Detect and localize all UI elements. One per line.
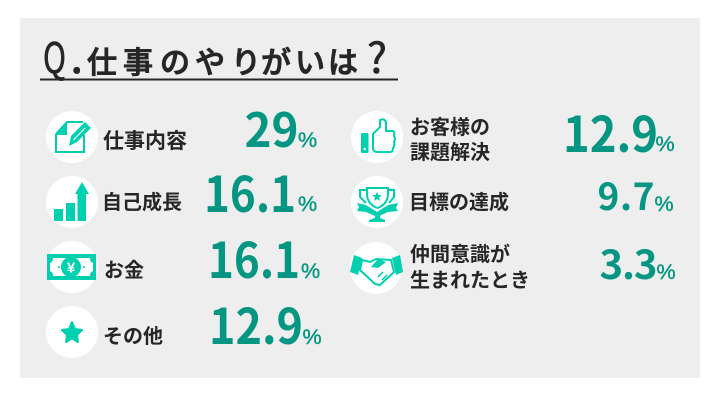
item: 仲間意識が生まれたとき 3.3% <box>350 233 676 294</box>
label: お客様の <box>410 116 490 139</box>
label <box>410 116 490 164</box>
percent: % <box>656 260 676 284</box>
item: 目標の達成 9.7% <box>351 167 674 228</box>
icon: trophy <box>351 176 403 228</box>
title: は <box>328 38 358 82</box>
value: 16.1 <box>204 156 296 227</box>
label: 目標の達成 <box>409 190 509 214</box>
value: 12.9 <box>563 96 658 167</box>
title: 仕 <box>87 38 117 82</box>
value: 12.9 <box>209 288 303 359</box>
item: 自己成長 16.1% <box>46 156 317 228</box>
icon: rising bars <box>46 176 98 228</box>
title: り <box>231 38 261 82</box>
label: 課題解決 <box>410 141 490 164</box>
item: 仕事内容 29% <box>46 92 317 163</box>
icon: paper and pencil <box>46 111 98 163</box>
label: 自己成長 <box>102 190 182 214</box>
percent: % <box>656 132 675 156</box>
icon: banknote: ¥ <box>67 260 76 276</box>
value: 3.3 <box>600 233 658 291</box>
icon: handshake <box>350 242 403 294</box>
title: Q <box>43 25 66 86</box>
label: その他 <box>103 325 163 348</box>
item: お金 16.1% <box>46 222 320 293</box>
icon: banknote <box>46 241 98 293</box>
label: 仕事内容 <box>103 129 187 153</box>
item: その他 12.9% <box>46 288 322 359</box>
title: . <box>71 29 82 84</box>
percent: % <box>302 325 322 349</box>
title: 事 <box>123 38 153 82</box>
percent: % <box>298 128 317 152</box>
value: 29 <box>244 92 298 161</box>
title: い <box>295 38 325 82</box>
value: 9.7 <box>598 167 654 221</box>
icon: thumbs up <box>351 111 403 163</box>
value: 16.1 <box>208 222 300 293</box>
percent: % <box>654 192 674 216</box>
title <box>40 25 398 86</box>
label: 仲間意識が <box>410 242 510 266</box>
label: 生まれたとき <box>410 269 530 292</box>
label <box>410 242 530 292</box>
percent: % <box>301 259 320 283</box>
label: お金 <box>104 259 144 282</box>
title: の <box>160 38 190 82</box>
title: が <box>261 38 291 82</box>
title: や <box>195 38 225 82</box>
title: ? <box>367 25 387 86</box>
percent: % <box>298 192 317 216</box>
item: お客様の課題解決 12.9% <box>351 96 675 167</box>
icon: star <box>46 306 98 358</box>
